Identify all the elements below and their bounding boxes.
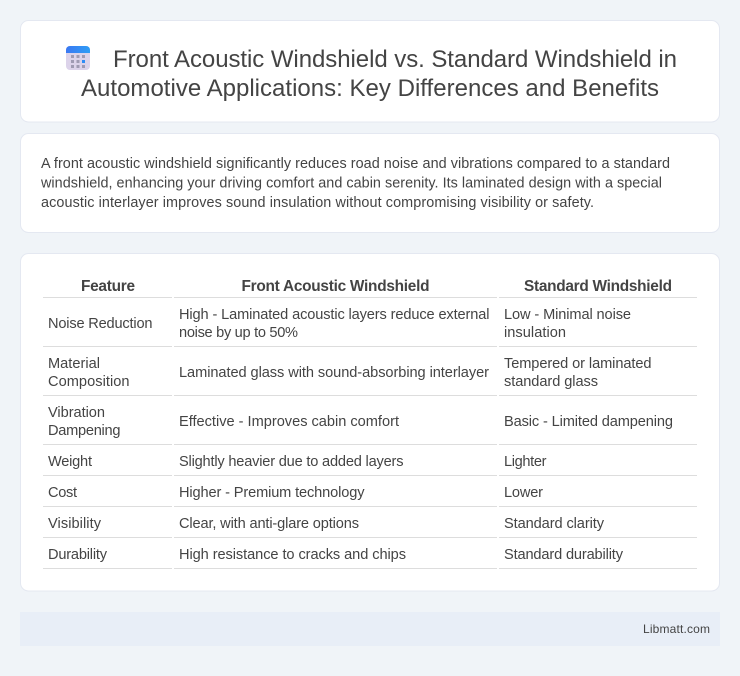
intro paragraph: A front acoustic windshield significantly reduces road noise and vibrations compared to a standard	[41, 156, 670, 172]
row: visibility: Clear, with anti-glare options	[179, 516, 359, 532]
row: material composition: standard glass	[504, 374, 598, 390]
row: noise reduction: insulation	[504, 325, 566, 341]
table header: Front Acoustic Windshield	[242, 278, 430, 295]
row: material composition: Laminated glass with sound-absorbing interlayer	[179, 365, 489, 381]
row: material composition: Tempered or laminated	[504, 356, 652, 372]
panel: title card	[20, 20, 720, 122]
row: vibration dampening	[48, 405, 673, 439]
row: durability: Standard durability	[504, 547, 624, 563]
row: durability: Durability	[48, 547, 108, 563]
row: visibility: Standard clarity	[504, 516, 605, 532]
row: vibration dampening: Vibration	[48, 405, 105, 421]
title	[81, 46, 677, 102]
row: noise reduction: Low - Minimal noise	[504, 307, 631, 323]
table row lines	[43, 297, 697, 569]
row: cost	[48, 485, 543, 501]
row: noise reduction: Noise Reduction	[48, 316, 152, 332]
row: material composition: Composition	[48, 374, 130, 390]
intro paragraph: windshield, enhancing your driving comfort and cabin serenity. Its laminated design with a special	[40, 176, 662, 192]
row: vibration dampening: Dampening	[48, 423, 120, 439]
table header: Feature	[81, 278, 135, 295]
title: Automotive Applications: Key Differences and Benefits	[81, 75, 659, 102]
row: cost: Higher - Premium technology	[179, 485, 365, 501]
panel: comparison table card	[20, 254, 720, 591]
row: visibility: Visibility	[48, 516, 102, 532]
table header: Standard Windshield	[524, 278, 672, 295]
icon: calendar	[66, 46, 90, 70]
footer	[20, 612, 720, 646]
row: material composition	[48, 356, 652, 390]
title: Front Acoustic Windshield vs. Standard Windshield in	[113, 46, 677, 73]
row: noise reduction	[48, 307, 631, 341]
row: weight	[48, 454, 547, 470]
row: noise reduction: High - Laminated acoustic layers reduce external	[179, 307, 490, 323]
row: cost: Lower	[504, 485, 543, 501]
intro paragraph: acoustic interlayer improves sound insulation without compromising visibility or safety.	[41, 195, 594, 211]
row: noise reduction: noise by up to 50%	[179, 325, 298, 341]
row: cost: Cost	[48, 485, 77, 501]
row: durability	[48, 547, 624, 563]
row: weight: Slightly heavier due to added layers	[179, 454, 404, 470]
row: weight: Lighter	[504, 454, 547, 470]
footer credit: Libmatt.com	[643, 622, 710, 636]
panel: intro text card	[20, 134, 720, 232]
table header	[81, 278, 672, 295]
intro paragraph	[40, 156, 670, 211]
row: weight: Weight	[48, 454, 92, 470]
row: visibility	[48, 516, 605, 532]
row: vibration dampening: Effective - Improves cabin comfort	[179, 414, 399, 430]
row: vibration dampening: Basic - Limited dampening	[504, 414, 673, 430]
row: material composition: Material	[48, 356, 100, 372]
row: durability: High resistance to cracks and chips	[179, 547, 406, 563]
